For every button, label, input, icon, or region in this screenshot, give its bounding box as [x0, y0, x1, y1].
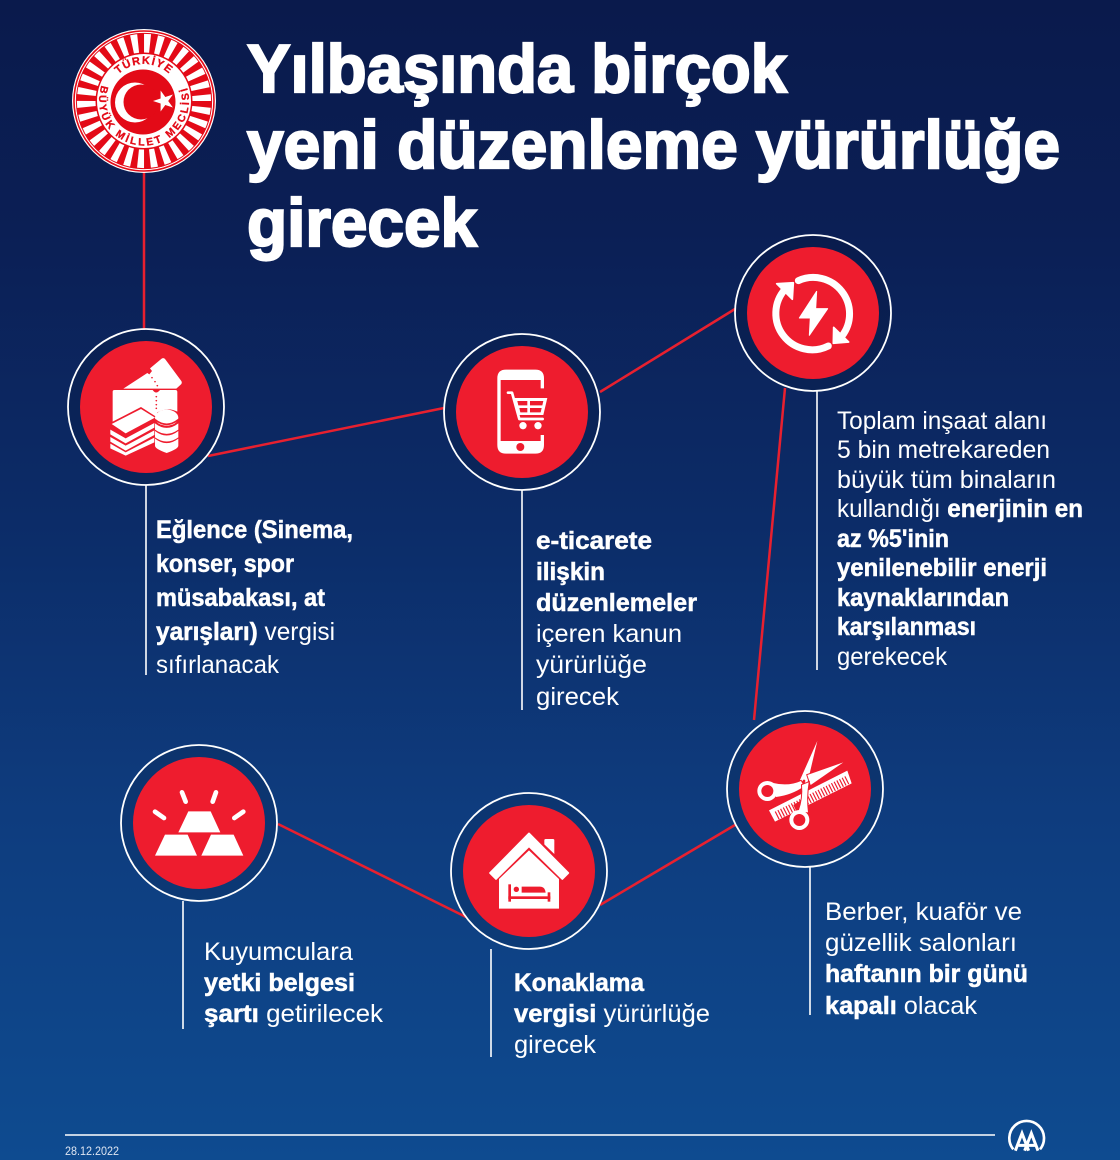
panel: entertainment tax [68, 329, 353, 679]
icon: parliament seal: TÜRKİYE [113, 56, 174, 74]
panel: barbers [727, 711, 1028, 1020]
leader line [816, 391, 818, 670]
title [247, 31, 1060, 261]
text: jewellers: Kuyumculara [204, 938, 353, 966]
text: jewellers: yetki belgesi [204, 969, 355, 997]
text: entertainment: müsabakası, at [156, 584, 326, 612]
text: e-commerce: ilişkin [536, 558, 605, 586]
text: barbers: kapalı olacak [825, 992, 977, 1020]
text: energy: yenilenebilir enerji [837, 554, 1047, 582]
circle: lodging [451, 793, 607, 949]
panel: renewable energy [735, 235, 1083, 671]
text: energy: karşılanması [837, 613, 976, 641]
leader line [809, 867, 811, 1015]
icon: parliament seal [72, 29, 216, 173]
leader line [145, 485, 147, 675]
icon: house with bed [490, 833, 568, 909]
footer rule [65, 1134, 995, 1136]
text: e-commerce [536, 527, 697, 711]
date: 28.12.2022 [65, 1146, 119, 1158]
circle: e-commerce [444, 334, 600, 490]
text: entertainment: sıfırlanacak [156, 651, 279, 679]
text: lodging [514, 969, 710, 1059]
connector: entertainment to e-commerce [208, 408, 444, 456]
text: lodging: Konaklama [514, 969, 645, 997]
circle: gold [121, 745, 277, 901]
text: entertainment: Eğlence (Sinema, [156, 516, 353, 544]
leader line [490, 949, 492, 1057]
text: e-commerce: e-ticarete [536, 527, 652, 555]
icon: tickets, money and coins [110, 358, 182, 456]
panel: lodging tax [451, 793, 710, 1059]
text: e-commerce: yürürlüğe [536, 651, 647, 679]
text: jewellers [204, 938, 384, 1028]
title: yeni düzenleme yürürlüğe [247, 107, 1060, 183]
panel: jewellers [121, 745, 384, 1029]
icon: gold bars [155, 792, 243, 856]
text: energy: az %5'inin [837, 525, 949, 553]
text: jewellers: şartı getirilecek [204, 1000, 384, 1028]
text: e-commerce: içeren kanun [536, 620, 682, 648]
text: entertainment: yarışları) vergisi [156, 618, 335, 646]
icon: AA logo [1009, 1121, 1044, 1151]
text: lodging: vergisi yürürlüğe [514, 1000, 710, 1028]
text: energy: kaynaklarından [837, 584, 1009, 612]
leader line [521, 490, 523, 710]
icon: renewable energy arrows and bolt [776, 277, 850, 350]
leader line [182, 901, 184, 1029]
connector: e-commerce to energy [600, 309, 735, 392]
icon: parliament seal: BÜYÜK MİLLET MECLİSİ [98, 86, 190, 146]
text: energy: kullandığı enerjinin en [837, 495, 1083, 523]
connector: lodging to gold [278, 824, 466, 917]
text: barbers: haftanın bir günü [825, 960, 1028, 988]
text: energy: büyük tüm binaların [837, 466, 1056, 494]
text: energy [837, 407, 1083, 671]
text: energy: 5 bin metrekareden [837, 436, 1050, 464]
text: lodging: girecek [514, 1031, 597, 1059]
circle: entertainment [68, 329, 224, 485]
icon: scissors and comb [757, 741, 852, 830]
text: barbers [825, 898, 1028, 1020]
text: energy: Toplam inşaat alanı [837, 407, 1047, 435]
connector: seal to first circle [143, 170, 145, 330]
circle: energy [735, 235, 891, 391]
text: barbers: Berber, kuaför ve [825, 898, 1022, 926]
icon: phone with shopping cart [497, 370, 547, 454]
text: e-commerce: girecek [536, 683, 620, 711]
text: entertainment: konser, spor [156, 550, 294, 578]
text: e-commerce: düzenlemeler [536, 589, 697, 617]
title: Yılbaşında birçok [247, 31, 787, 107]
circle: barber [727, 711, 883, 867]
text: energy: gerekecek [837, 643, 947, 671]
connector: energy to barber [754, 388, 785, 720]
title: girecek [247, 185, 477, 261]
connector: barber to lodging [600, 825, 735, 905]
text: barbers: güzellik salonları [825, 929, 1017, 957]
panel: e-commerce [444, 334, 697, 711]
text: entertainment [156, 516, 353, 679]
